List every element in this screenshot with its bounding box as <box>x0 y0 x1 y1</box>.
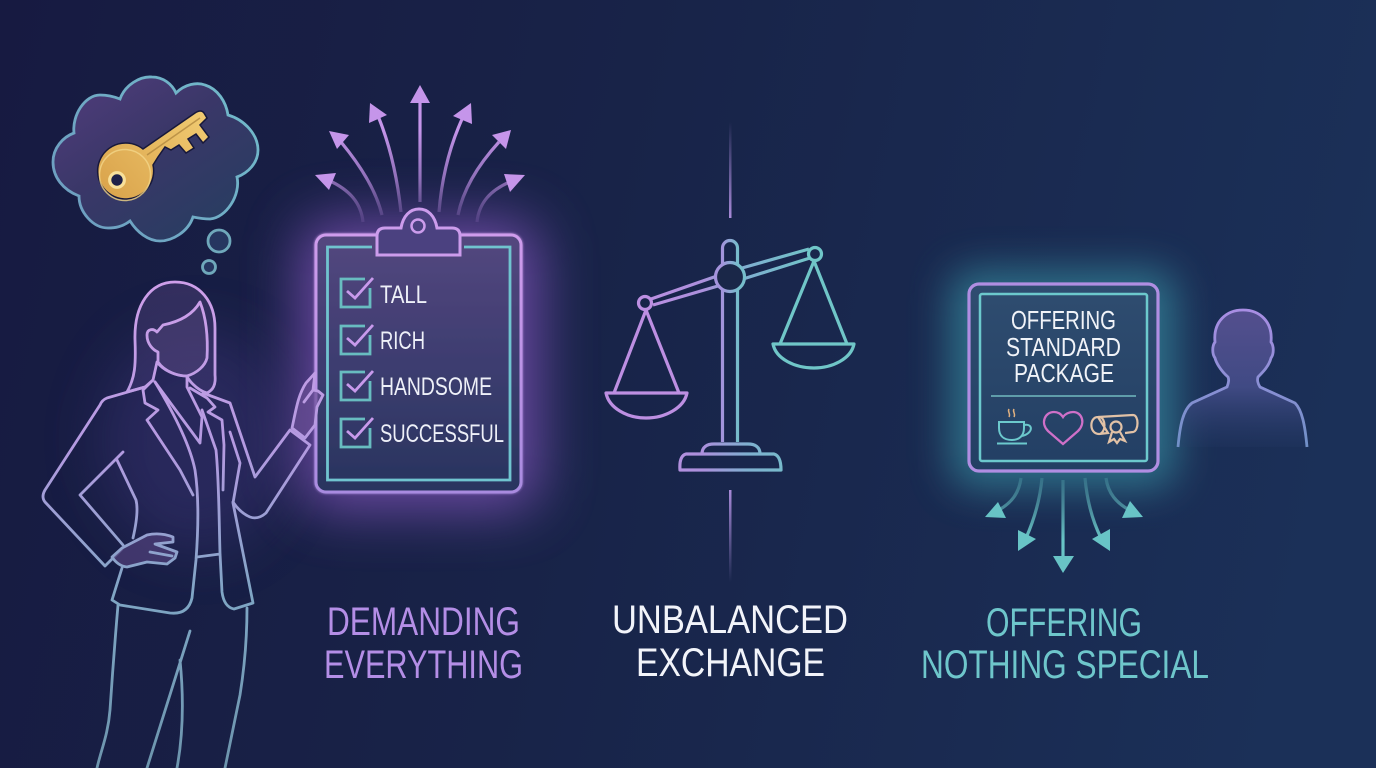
panel: unbalanced exchange <box>606 122 854 685</box>
arrow 2 <box>1018 478 1042 551</box>
board frame <box>316 235 521 492</box>
right lapel and jacket front <box>190 388 253 609</box>
checklist item: rich <box>341 325 425 355</box>
jacket body <box>43 380 198 613</box>
base <box>680 444 781 470</box>
heading: unbalanced exchange <box>612 598 848 685</box>
heading: demanding everything <box>324 600 523 687</box>
figure: faded person silhouette <box>1178 310 1307 447</box>
left pan <box>606 296 687 418</box>
inner frame <box>980 294 1147 461</box>
raised hand <box>292 373 323 438</box>
checklist item: tall <box>341 278 427 309</box>
checklist item: tall: TALL <box>380 281 427 309</box>
thought cloud <box>53 77 258 241</box>
checklist item: successful: SUCCESSFUL <box>380 420 504 448</box>
package glow <box>950 270 1176 488</box>
arrows: radiating upward <box>315 85 525 222</box>
checklist item: rich: RICH <box>380 327 425 355</box>
trousers <box>97 605 247 768</box>
package text: STANDARD <box>1006 332 1121 362</box>
clipboard <box>316 209 521 492</box>
hip hand <box>112 534 177 567</box>
clipboard glow <box>300 220 540 510</box>
heading: demanding everything: EVERYTHING <box>324 643 523 687</box>
package text <box>1006 305 1121 388</box>
divider top <box>729 122 732 218</box>
arrow 7 <box>477 174 525 222</box>
figure: woman in suit <box>43 282 323 768</box>
icon: thought cloud with key <box>53 77 258 274</box>
pivot <box>716 262 744 292</box>
right arm <box>203 393 310 518</box>
arrow 4 <box>410 85 430 202</box>
arrow 3 <box>369 103 401 212</box>
inner frame <box>328 247 510 480</box>
clip <box>377 209 460 255</box>
arrow 5 <box>439 103 472 212</box>
arrows: falling downward <box>985 478 1143 573</box>
icon: heart <box>1044 412 1082 444</box>
package text: PACKAGE <box>1014 358 1114 388</box>
hair and head <box>127 282 215 393</box>
face <box>147 302 207 376</box>
package text: OFFERING <box>1011 305 1116 335</box>
arrow 3 <box>1053 480 1074 573</box>
arrow 1 <box>985 478 1021 518</box>
heading: demanding everything: DEMANDING <box>327 600 520 644</box>
heading: offering nothing special: NOTHING SPECIAL <box>921 643 1209 687</box>
panel: demanding side <box>43 77 540 768</box>
arrow 6 <box>458 130 511 215</box>
divider bottom <box>729 490 732 582</box>
right pan <box>773 248 854 368</box>
heading: unbalanced exchange: EXCHANGE <box>636 641 825 685</box>
arrow 4 <box>1085 478 1110 551</box>
icon: coffee cup <box>997 409 1031 444</box>
arrow 1 <box>315 173 363 222</box>
post <box>722 241 738 442</box>
icon: tilted balance scale <box>606 241 854 470</box>
arrow 5 <box>1106 478 1143 518</box>
icon: gold key <box>98 111 209 200</box>
heading: offering nothing special <box>921 601 1209 687</box>
panel: offering nothing special <box>921 270 1307 687</box>
arrow 2 <box>329 131 382 215</box>
heading: offering nothing special: OFFERING <box>986 601 1142 645</box>
checklist item: handsome <box>341 371 492 401</box>
thought bubbles <box>202 230 230 274</box>
beam <box>651 249 810 305</box>
checklist item: successful <box>341 418 504 448</box>
card divider <box>991 395 1136 397</box>
icon: diploma scroll <box>1091 415 1138 443</box>
card frame <box>969 284 1158 471</box>
checklist item: handsome: HANDSOME <box>380 373 492 401</box>
shirt collar <box>155 376 202 443</box>
heading: unbalanced exchange: UNBALANCED <box>612 598 848 642</box>
package card <box>969 284 1158 471</box>
